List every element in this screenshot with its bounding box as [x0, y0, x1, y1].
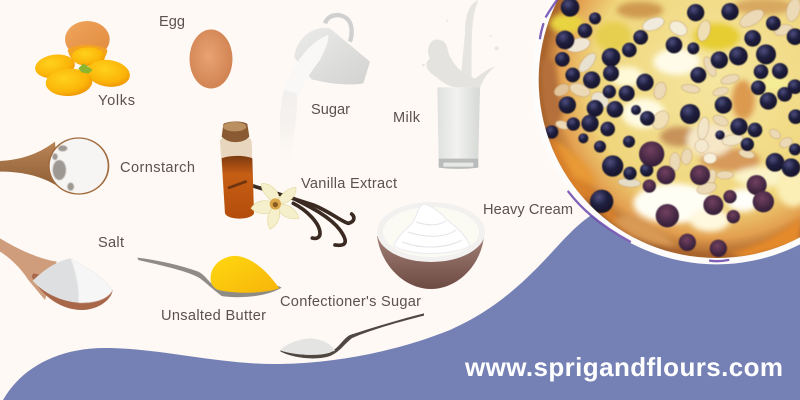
website URL: www.sprigandflours.com — [464, 352, 783, 382]
photo: blueberry clafoutis in dish — [532, 0, 800, 264]
label: Unsalted Butter: Unsalted Butter — [161, 308, 266, 324]
label: Sugar: Sugar — [311, 102, 350, 118]
label: Cornstarch: Cornstarch — [120, 160, 195, 176]
icon: bowl of whipped heavy cream — [377, 202, 485, 289]
label: Heavy Cream: Heavy Cream — [483, 202, 573, 218]
label: Egg: Egg — [159, 14, 185, 30]
icon: vanilla extract bottle, flower and pods — [220, 121, 354, 245]
baked reddish berries — [639, 141, 774, 257]
icon: egg yolks — [34, 21, 132, 97]
label: Milk: Milk — [393, 110, 421, 126]
label: Salt: Salt — [98, 235, 124, 251]
icon: cornstarch on wooden spoon — [0, 137, 109, 195]
icon: confectioner's sugar on spoon — [280, 313, 424, 358]
icon: sugar pouring from white cup — [280, 15, 370, 167]
icon: salt on wooden spoon — [0, 238, 113, 310]
blueberries — [545, 0, 800, 213]
blue wave background shape — [3, 216, 800, 400]
label: Yolks: Yolks — [98, 93, 135, 109]
label: Vanilla Extract: Vanilla Extract — [301, 176, 397, 192]
icon: egg — [190, 30, 232, 88]
purple juice stains on rim — [540, 1, 728, 261]
icon: milk pouring into glass — [422, 0, 499, 169]
label: Confectioner's Sugar: Confectioner's Sugar — [280, 294, 421, 310]
icon: butter on metal spoon — [137, 256, 282, 297]
almond flakes — [552, 0, 800, 196]
